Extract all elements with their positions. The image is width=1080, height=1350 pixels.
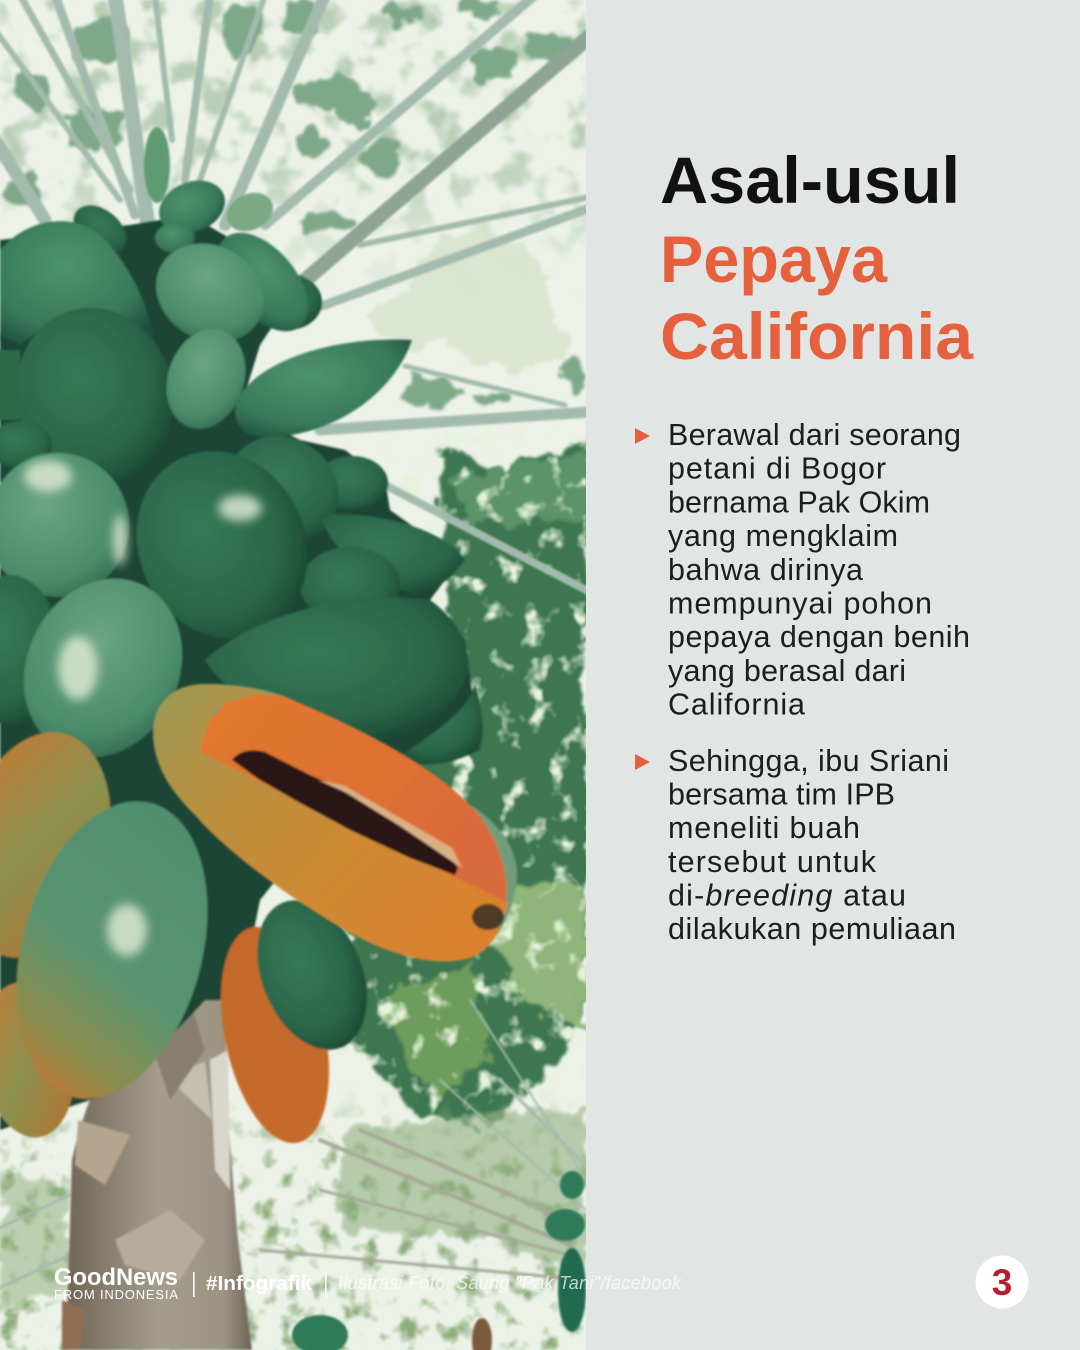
photo: papaya tree — [0, 0, 590, 1350]
bullet point 1 — [635, 418, 970, 722]
sunlight highlights on fruit — [24, 460, 262, 956]
bullet arrow — [635, 428, 650, 444]
footer credits — [54, 1264, 682, 1302]
bullet point 2 — [635, 744, 956, 946]
page number badge: 3 — [992, 1262, 1012, 1303]
pale sky background — [0, 0, 586, 1350]
bullet point 2: meneliti buah — [668, 811, 860, 845]
bullet point 1: Berawal dari seorang — [668, 418, 961, 452]
bullet point 2: di-breeding atau — [668, 878, 906, 912]
logo: GoodNews from Indonesia: GoodNews — [54, 1264, 178, 1291]
bullet point 1: bahwa dirinya — [668, 553, 863, 587]
page number badge — [976, 1256, 1028, 1308]
bullet point 1: petani di Bogor — [668, 452, 886, 486]
papaya fruit cluster: green and ripening fruit — [0, 127, 482, 1153]
title — [660, 143, 974, 373]
title line: California: California — [660, 299, 974, 373]
right panel background — [586, 0, 1080, 1350]
bullet point 2: Sehingga, ibu Sriani — [668, 744, 949, 778]
bullet point 1: yang mengklaim — [668, 519, 898, 553]
papaya skin — [211, 685, 518, 930]
bullet point 1: yang berasal dari — [668, 654, 906, 688]
shadow behind the cluster — [0, 215, 480, 1130]
title line: Asal-usul: Asal-usul — [660, 143, 960, 217]
small fruits at the base — [292, 1171, 586, 1350]
bullet arrow — [635, 754, 650, 770]
bullet point 2: tersebut untuk — [668, 845, 877, 879]
papaya seeds — [232, 750, 458, 875]
bullet point 2: dilakukan pemuliaan — [668, 912, 956, 946]
photo credit: Ilustrasi Foto: Saung "Pak Tani"/facebook — [338, 1273, 682, 1293]
papaya flesh — [200, 694, 507, 902]
tree trunk — [60, 998, 254, 1350]
foliage: dark palm leaves on the right — [345, 440, 586, 1125]
papaya tip — [472, 904, 504, 930]
foliage: pale lower leaves — [340, 1110, 586, 1270]
frond stems — [0, 0, 590, 1290]
bullet point 1: bernama Pak Okim — [668, 485, 930, 519]
cut-open ripe papaya — [153, 684, 517, 961]
title line: Pepaya: Pepaya — [660, 222, 888, 296]
bullet point 1: pepaya dengan benih — [668, 620, 970, 654]
hashtag: #Infografik — [206, 1273, 313, 1295]
bullet point 2: bersama tim IPB — [668, 778, 895, 812]
bullet point 1: mempunyai pohon — [668, 586, 932, 620]
papaya lower rind — [153, 684, 508, 961]
logo: GoodNews from Indonesia: FROM INDONESIA — [54, 1287, 178, 1302]
bullet point 1: California — [668, 688, 805, 722]
foliage: pale upper leaves — [0, 0, 586, 1350]
